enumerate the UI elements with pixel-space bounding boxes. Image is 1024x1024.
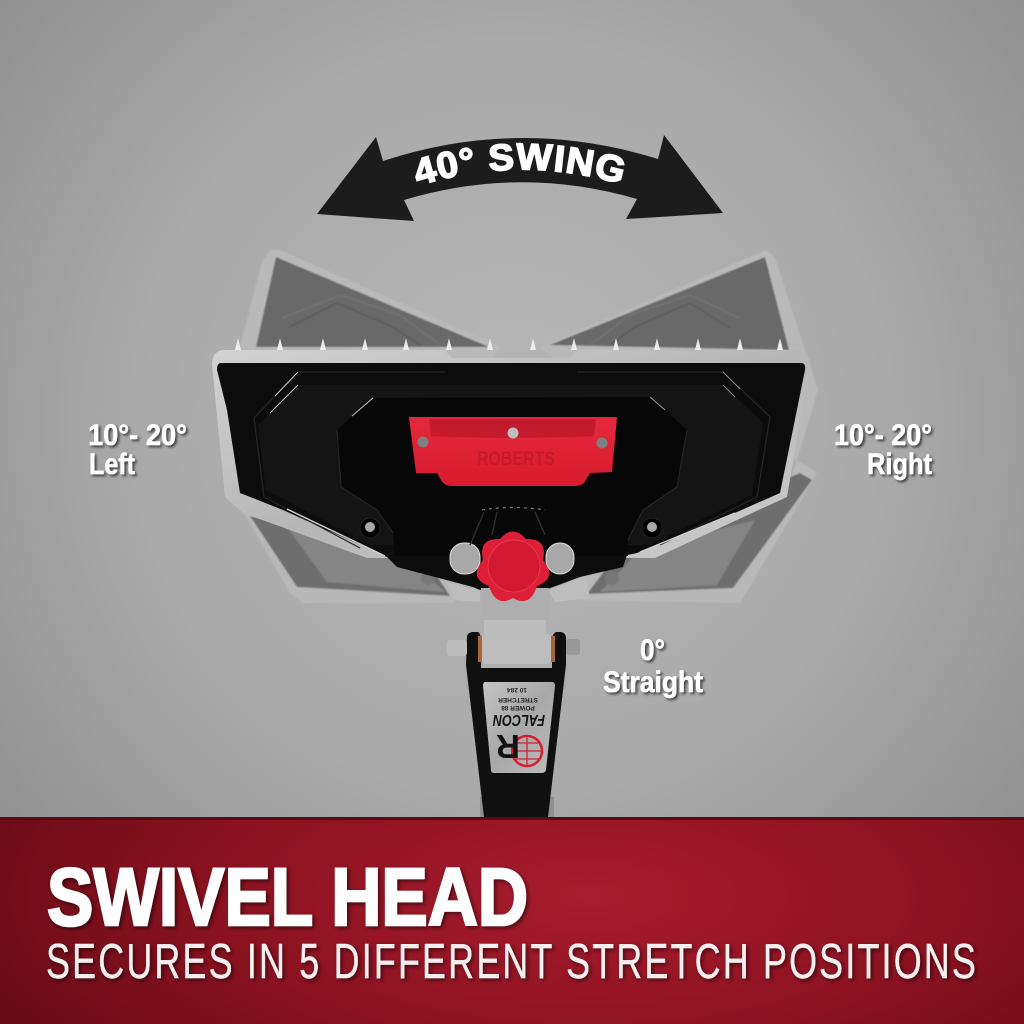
arrow label: 40° SWING (415, 142, 624, 184)
label: right: Right (867, 448, 932, 481)
label: straight: Straight (603, 666, 703, 699)
inner ridge (337, 397, 687, 556)
metal nameplate (483, 682, 555, 773)
swing arrow (317, 135, 723, 221)
title: SWIVEL HEAD (47, 852, 528, 943)
bracket (478, 588, 553, 668)
red handle (409, 417, 617, 486)
ghost head positions (225, 250, 818, 603)
plate screws (360, 518, 662, 538)
metal nameplate: STRETCHER (498, 696, 538, 703)
label: straight: 0° (640, 634, 665, 667)
label: right (834, 419, 932, 481)
teeth (235, 338, 783, 350)
outer ridge (254, 372, 770, 548)
label: right: 10°- 20° (834, 419, 932, 452)
label: left (88, 419, 187, 481)
metal nameplate: FALCON (493, 711, 545, 728)
label: straight (603, 634, 703, 699)
ghost: lower right (560, 460, 817, 603)
handle logo: ROBERTS (477, 449, 555, 470)
roller (482, 634, 551, 664)
label: left: 10°- 20° (88, 419, 187, 452)
metal nameplate: POWER 88 (501, 704, 535, 711)
adjustment slots (448, 508, 590, 602)
bottom edge highlights (287, 509, 735, 556)
silver frame (212, 350, 810, 558)
ghost: lower left (225, 497, 470, 603)
red knob (477, 532, 549, 601)
handle pocket (429, 419, 596, 438)
banner (0, 817, 1024, 1024)
label: left: Left (89, 448, 135, 481)
side pins (480, 797, 554, 817)
head plate (212, 338, 810, 590)
ghost: upper right (541, 250, 818, 460)
swivel arm (447, 588, 580, 817)
ghost: upper left (230, 250, 501, 400)
metal nameplate: 10 284 (507, 686, 527, 693)
bolts (447, 640, 467, 656)
black plate (217, 363, 805, 590)
metal nameplate: R (496, 728, 520, 765)
black arm (466, 632, 566, 817)
